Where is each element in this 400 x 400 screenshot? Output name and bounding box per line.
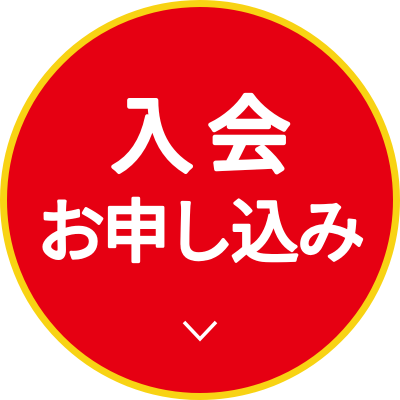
- icon: down chevron: [184, 322, 216, 339]
- subheading: お申し込み: お: [37, 195, 105, 271]
- subheading: お申し込み: [37, 195, 365, 271]
- subheading: お申し込み: 込: [231, 195, 299, 271]
- heading: 入会: [110, 90, 290, 183]
- heading: 入会: 入: [110, 90, 194, 183]
- subheading: お申し込み: し: [166, 195, 234, 271]
- subheading: お申し込み: み: [297, 195, 365, 271]
- heading: 入会: 会: [208, 90, 290, 183]
- subheading: お申し込み: 申: [102, 195, 170, 271]
